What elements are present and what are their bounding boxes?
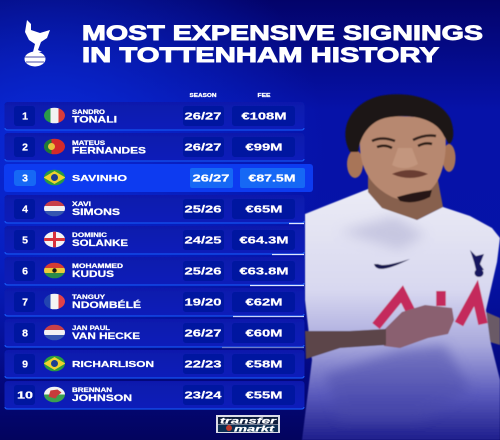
row 7: 19/20 xyxy=(184,296,222,308)
row 3 highlighted xyxy=(4,164,313,192)
row 10: €55M xyxy=(246,390,283,402)
ears xyxy=(347,150,363,178)
row 8: 26/27 xyxy=(184,328,222,340)
row 7: 7 xyxy=(22,296,28,308)
row 5: SOLANKE xyxy=(72,238,128,249)
hair xyxy=(345,94,453,152)
club crest xyxy=(24,20,50,66)
row 4: 25/26 xyxy=(184,204,222,216)
row 8 xyxy=(4,319,304,348)
transfermarkt logo: markt xyxy=(234,424,276,434)
row 1: 26/27 xyxy=(184,110,222,122)
row 10: JOHNSON xyxy=(72,393,132,404)
row 4: XAVI xyxy=(72,202,91,208)
row 5: 24/25 xyxy=(184,234,222,246)
row 8: €60M xyxy=(246,328,283,340)
row 1: 1 xyxy=(22,110,28,122)
row 9: 22/23 xyxy=(184,358,222,370)
shirt xyxy=(302,189,500,440)
row 4 xyxy=(4,195,304,224)
player photo xyxy=(302,94,500,440)
row 1: €108M xyxy=(242,110,287,122)
row 5: 5 xyxy=(22,234,28,246)
row 2: 2 xyxy=(22,142,28,154)
row 2: 26/27 xyxy=(184,142,222,154)
row 6: KUDUS xyxy=(72,269,114,280)
row 1: SANDRO xyxy=(72,110,105,116)
row 7: NDOMBÉLÉ xyxy=(72,300,141,311)
row 8: JAN PAUL xyxy=(72,326,110,332)
eyes and brows xyxy=(372,136,436,141)
row 5: €64.3M xyxy=(240,234,289,246)
spurs crest xyxy=(470,250,484,277)
AIA sponsor xyxy=(376,291,483,326)
neck xyxy=(368,170,443,220)
row 10: 23/24 xyxy=(184,390,222,402)
nose xyxy=(392,148,418,168)
row 2: MATEUS xyxy=(72,141,105,147)
title: MOST EXPENSIVE SIGNINGS xyxy=(82,22,483,45)
row 7: €62M xyxy=(246,296,283,308)
head xyxy=(360,115,446,200)
row 9 xyxy=(4,350,304,378)
title xyxy=(82,22,483,67)
row 4: €65M xyxy=(246,204,283,216)
row 6: €63.8M xyxy=(240,266,289,278)
row 2: €99M xyxy=(246,142,283,154)
row 5: DOMINIC xyxy=(72,233,108,239)
transfermarkt logo: transfer xyxy=(220,416,277,426)
mouth xyxy=(392,170,428,178)
row 6: 6 xyxy=(22,266,28,278)
row 1: TONALI xyxy=(72,114,117,126)
row 10: 10 xyxy=(17,390,33,402)
row 9: 9 xyxy=(22,358,28,370)
row 6: 25/26 xyxy=(184,266,222,278)
row 3 highlighted: 3 xyxy=(22,172,28,184)
row 9: RICHARLISON xyxy=(72,359,154,369)
column headers xyxy=(190,93,271,99)
row 6 xyxy=(4,257,304,286)
other arm at right xyxy=(486,312,500,345)
row 6: MOHAMMED xyxy=(72,264,124,270)
row 10 xyxy=(4,381,304,409)
row 9: €58M xyxy=(246,358,283,370)
column headers: SEASON xyxy=(190,93,217,99)
row 7: TANGUY xyxy=(72,295,105,301)
row 3 highlighted: €87.5M xyxy=(248,172,296,184)
transfermarkt logo xyxy=(216,415,280,434)
row 8: VAN HECKE xyxy=(72,331,140,342)
row 2 xyxy=(4,133,304,161)
row 10: BRENNAN xyxy=(72,388,112,394)
goatee xyxy=(397,190,432,202)
title: IN TOTTENHAM HISTORY xyxy=(82,44,439,67)
row 7 xyxy=(4,288,304,316)
column headers: FEE xyxy=(258,93,271,99)
row 5 xyxy=(4,226,304,254)
nike swoosh xyxy=(374,259,410,269)
row 3 highlighted: SAVINHO xyxy=(72,173,128,183)
row 3 highlighted: 26/27 xyxy=(192,172,230,184)
row 1 xyxy=(4,102,304,130)
row 4: 4 xyxy=(22,204,28,216)
shirt shading xyxy=(325,345,470,420)
row 2: FERNANDES xyxy=(72,146,146,156)
row 8: 8 xyxy=(22,328,28,340)
hand xyxy=(382,305,454,348)
forearm xyxy=(305,329,386,359)
row 4: SIMONS xyxy=(72,207,120,218)
